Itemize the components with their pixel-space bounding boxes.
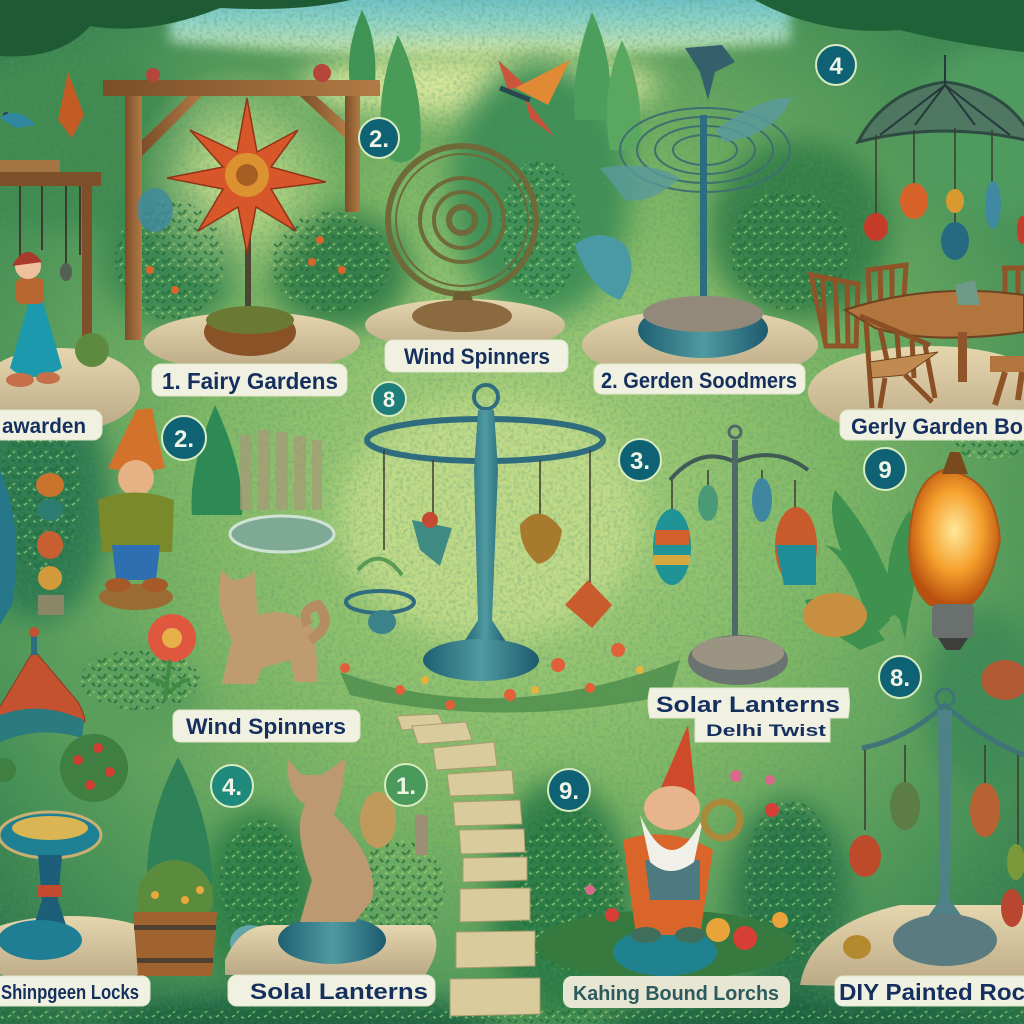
- badge: 4 top right: 4: [829, 53, 843, 80]
- icon: red star: [167, 98, 326, 254]
- badge: 4 lower: [211, 765, 253, 807]
- canopy: top right foliage: [755, 0, 1024, 52]
- front chair: [860, 316, 935, 408]
- label: Wind Spinners lower: [173, 710, 360, 742]
- badge: 8 centre: 8: [383, 387, 395, 412]
- label: Kahing Bound Lorchs: Kahing Bound Lorchs: [573, 983, 779, 1005]
- icon: girl figure: [6, 252, 62, 387]
- label: Fairy Gardens: 1. Fairy Gardens: [162, 368, 338, 394]
- badge: 2 gnome: 2.: [174, 426, 194, 453]
- panel: squirrel statue: [225, 758, 436, 975]
- badge: 3 lantern: 3.: [630, 448, 650, 475]
- badge: 1 lower: 1.: [396, 773, 416, 800]
- panel: gnome with flowers: [535, 725, 795, 980]
- panel: glowing bulb with plant: [803, 452, 1024, 700]
- label: Solar Lanterns: [648, 688, 850, 742]
- badge: 9 gnome: 9.: [559, 778, 579, 805]
- panel: lantern stand bottom right: [800, 689, 1024, 990]
- badge: 2 near pergola: 2.: [369, 126, 389, 153]
- panel: stone path: [397, 714, 540, 1016]
- panel: solar lantern stand: [653, 426, 817, 685]
- label: Wind Spinners top: [385, 340, 568, 372]
- pergola frame: [103, 80, 380, 340]
- badge: 4 lower: 4.: [222, 774, 242, 801]
- label: Gerly Garden Bo: Gerly Garden Bo: [851, 414, 1023, 439]
- badge: 4 top right: [816, 45, 856, 85]
- icon: left lantern: [653, 509, 691, 585]
- panel: spiral garden spinner: [575, 45, 818, 381]
- panel: central hanging stand: [340, 385, 680, 712]
- badge: 9 bulb: [864, 448, 906, 490]
- icon: flying butterfly: [498, 60, 570, 137]
- back chairs: [811, 265, 1024, 346]
- label: Shinpgeen Locks: Shinpgeen Locks: [1, 982, 139, 1004]
- label: Gerden Soodmers: 2. Gerden Soodmers: [601, 368, 797, 393]
- panel: gnome with fence: [98, 405, 334, 610]
- badge: 2 near pergola: [359, 118, 399, 158]
- panel: garden table and chairs: [808, 265, 1024, 438]
- badge: 8 right: 8.: [890, 665, 910, 692]
- panel: wind spinner disc: [365, 146, 565, 351]
- label: Wind Spinners top: Wind Spinners: [404, 344, 550, 369]
- badge: 8 right: [879, 656, 921, 698]
- icon: stone cat statue: [219, 570, 325, 684]
- badge: 8 centre: [372, 382, 406, 416]
- badge: 9 bulb: 9: [878, 457, 892, 484]
- panel: hanging lantern gazebo: [858, 55, 1024, 260]
- canopy: top left foliage: [0, 0, 350, 56]
- label: Solal Lanterns: Solal Lanterns: [250, 979, 428, 1004]
- panel: stacked totem: [0, 470, 64, 625]
- label: awarden: [0, 410, 102, 440]
- distant cypress trees: [349, 10, 641, 162]
- badge: 2 gnome: [162, 416, 206, 460]
- panel: birdbath under umbrella: [0, 627, 170, 984]
- label: Solal Lanterns: [228, 975, 435, 1006]
- label: awarden: awarden: [2, 415, 86, 438]
- icon: right lantern: [775, 507, 817, 585]
- badge: 9 gnome: [548, 769, 590, 811]
- badge: 3 lantern: [619, 439, 661, 481]
- panel: topiary in barrel: [133, 757, 270, 976]
- label: Solar Lanterns: Delhi Twist: [706, 721, 826, 740]
- badge: 1 lower: [385, 764, 427, 806]
- panel: fairy garden swing at left: [0, 72, 140, 432]
- label: Shinpgeen Locks: [0, 976, 150, 1006]
- label: Kahing Bound Lorchs: [563, 976, 790, 1008]
- icon: red flower: [148, 614, 196, 700]
- label: Solar Lanterns: Solar Lanterns: [656, 692, 840, 717]
- table top: [845, 291, 1024, 338]
- panel: garden star sculpture under pergola: [103, 64, 380, 372]
- label: DIY Painted Rock: DIY Painted Roc: [839, 979, 1024, 1005]
- label: Wind Spinners lower: Wind Spinners: [186, 714, 346, 739]
